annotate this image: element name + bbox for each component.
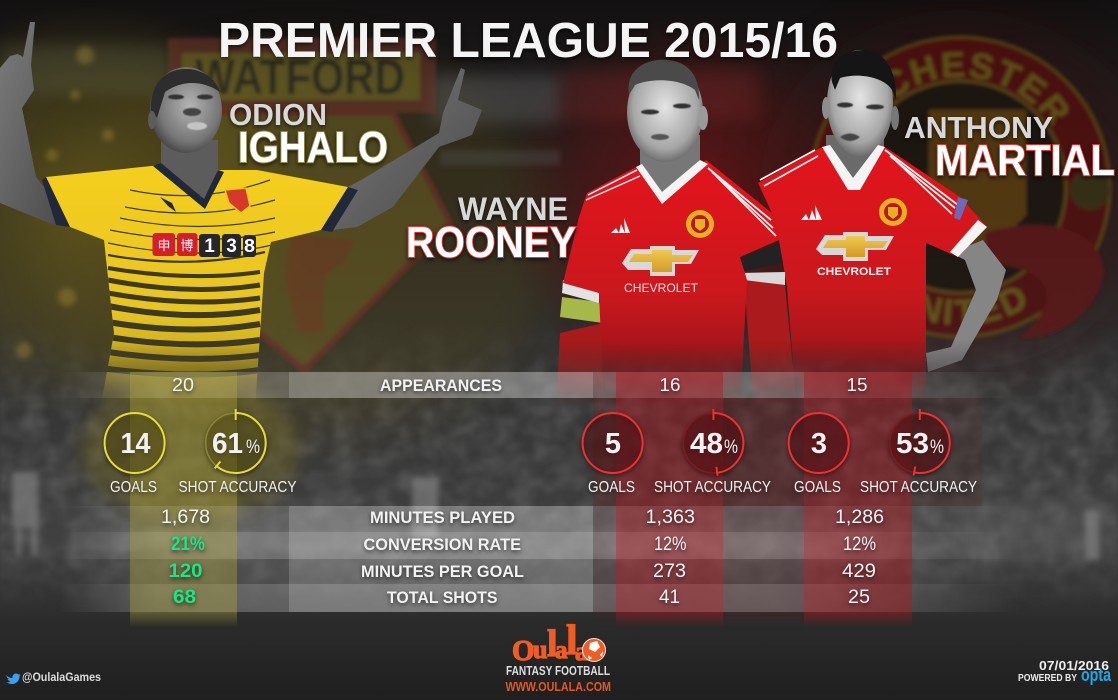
rooney neck: [640, 135, 700, 192]
row: total shots: [173, 587, 870, 608]
ighalo neck: [161, 140, 218, 205]
manchester united crest (blurred): MANCHESTER: [890, 49, 1070, 128]
row: appearances: 16: [660, 375, 680, 395]
martial shot accuracy ring: 53: [896, 428, 929, 460]
logo wordmark: a: [555, 637, 568, 664]
rooney head: [627, 60, 708, 162]
player: martial: [758, 50, 1006, 410]
martial shirt badge: [879, 198, 907, 226]
row: minutes played: 1,286: [835, 507, 884, 528]
date: 07/01/2016: [1039, 658, 1109, 673]
martial shot accuracy label: SHOT ACCURACY: [860, 479, 977, 496]
ighalo shot accuracy ring: [206, 409, 266, 473]
martial shot accuracy ring: %: [930, 437, 944, 458]
ighalo goals circle: [105, 413, 165, 473]
player: rooney: [556, 60, 797, 410]
row: conversion rate: 12%: [654, 534, 687, 555]
ighalo shot accuracy ring: 61: [212, 428, 243, 460]
powered by opta: [1018, 665, 1112, 685]
row: minutes per goal: 273: [653, 561, 686, 582]
name: anthony martial: [904, 110, 1115, 185]
rooney red shirt: [563, 160, 779, 410]
row: minutes per goal: 120: [168, 561, 202, 582]
rooney right sleeve: [740, 243, 797, 410]
logo url: WWW.OULALA.COM: [506, 680, 611, 694]
row: minutes played: MINUTES PLAYED: [370, 508, 515, 527]
row: minutes played: 1,363: [646, 507, 695, 528]
rooney chevrolet sponsor: CHEVROLET: [624, 283, 698, 295]
twitter handle: @OulalaGames: [22, 670, 101, 684]
ighalo shot accuracy ring: %: [246, 437, 260, 458]
powered by opta: POWERED BY: [1018, 673, 1077, 684]
row: minutes played: 1,678: [161, 507, 210, 528]
martial chevrolet sponsor: CHEVROLET: [817, 266, 891, 278]
logo tagline: FANTASY FOOTBALL: [506, 664, 610, 678]
logo wordmark: l: [547, 623, 558, 665]
rooney shot accuracy ring: %: [724, 437, 738, 458]
row: conversion rate: [171, 534, 876, 555]
rooney shot accuracy ring: 48: [690, 428, 723, 460]
ighalo shirt sponsor: 1: [204, 236, 215, 257]
watford crest (blurred): [168, 38, 450, 370]
row: conversion rate: 12%: [843, 534, 876, 555]
ighalo right arm and hand: [332, 68, 482, 230]
martial red shirt: [758, 145, 987, 410]
ighalo shirt sponsor: 3: [226, 236, 237, 257]
row: appearances: APPEARANCES: [380, 376, 502, 395]
logo wordmark: a: [575, 637, 588, 666]
ighalo shirt sponsor: 8: [244, 236, 255, 256]
row: minutes played: [161, 507, 884, 528]
martial chevrolet sponsor: [816, 232, 894, 278]
name: wayne rooney: [406, 191, 576, 267]
logo wordmark: u: [533, 635, 547, 664]
ighalo shirt badge: [225, 188, 250, 213]
martial shot accuracy ring: [890, 409, 950, 475]
rooney goals circle: [583, 413, 643, 473]
martial goals circle: [789, 413, 849, 473]
rooney left sleeve and captain armband: [557, 280, 604, 400]
ighalo shot accuracy label: SHOT ACCURACY: [178, 479, 296, 496]
row: total shots: 68: [173, 587, 196, 608]
name: odion ighalo: IGHALO: [238, 123, 388, 172]
ighalo left arm and hand: [0, 22, 70, 227]
rooney goals circle: 5: [605, 428, 621, 460]
manchester united crest (blurred): UNITED: [926, 285, 1028, 327]
player: ighalo: [0, 22, 482, 410]
powered by opta: opta: [1081, 665, 1112, 685]
logo football: [582, 638, 606, 662]
rooney shot accuracy label: SHOT ACCURACY: [654, 479, 771, 496]
martial goals label: GOALS: [794, 479, 841, 496]
row: appearances: 20: [172, 375, 194, 395]
ighalo goals label: GOALS: [110, 479, 157, 496]
name: odion ighalo: [229, 97, 388, 172]
ighalo shirt sponsor: 博: [180, 235, 194, 254]
row: appearances: 15: [846, 375, 868, 395]
row: minutes per goal: MINUTES PER GOAL: [361, 562, 524, 581]
watford crest (blurred): WATFORD: [195, 49, 405, 105]
rooney goals label: GOALS: [588, 479, 635, 496]
row: minutes per goal: 429: [842, 561, 876, 582]
row: total shots: 41: [659, 587, 680, 608]
martial arm: [926, 240, 1006, 372]
martial goals circle: 3: [811, 428, 827, 460]
rooney shot accuracy ring: [683, 409, 743, 476]
name: wayne rooney: ROONEY: [406, 218, 576, 267]
title: PREMIER LEAGUE 2015/16: [218, 14, 838, 68]
ighalo head: [148, 67, 222, 153]
row: minutes per goal: [168, 561, 876, 582]
manchester united crest (blurred): [812, 34, 1113, 340]
name: wayne rooney: WAYNE: [458, 191, 568, 227]
ighalo shirt sponsor: 申: [157, 235, 171, 254]
ighalo goals circle: 14: [120, 428, 150, 460]
ighalo shirt sponsor: [152, 233, 256, 257]
martial adidas logo: [801, 205, 822, 220]
row: total shots: TOTAL SHOTS: [387, 588, 498, 607]
rooney adidas logo: [611, 218, 630, 233]
row: appearances: [172, 375, 868, 395]
name: odion ighalo: ODION: [229, 97, 327, 132]
logo wordmark: O: [512, 635, 535, 667]
stat table bands: [60, 372, 1020, 627]
row: conversion rate: 21%: [171, 534, 205, 555]
martial head: [822, 50, 899, 156]
ighalo yellow shirt: [42, 163, 358, 410]
oulala logo: [506, 618, 611, 694]
rooney chevrolet sponsor: [622, 246, 699, 295]
name: anthony martial: ANTHONY: [904, 110, 1053, 145]
martial neck: [826, 135, 884, 178]
rooney shirt badge: [686, 210, 714, 238]
twitter bird glyph: [6, 674, 21, 684]
row: conversion rate: CONVERSION RATE: [364, 535, 521, 554]
row: total shots: 25: [848, 587, 870, 608]
logo wordmark: l: [566, 618, 578, 664]
